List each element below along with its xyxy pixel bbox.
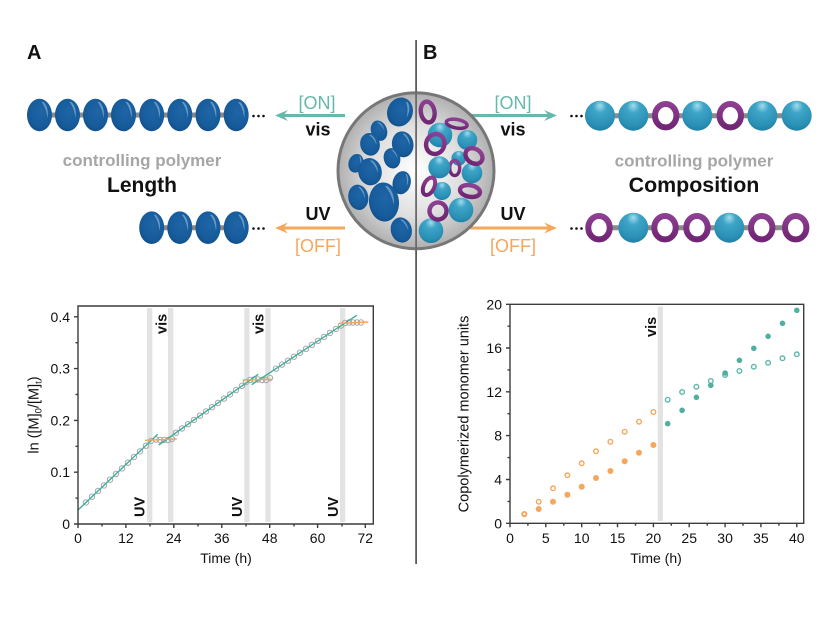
- vis label: vis: [644, 317, 660, 337]
- label: left [OFF]: [OFF]: [295, 236, 341, 256]
- y axis tick labels: [51, 309, 70, 532]
- teal spheres and purple rings in circle: [419, 100, 486, 243]
- x axis tick labels: 24: [166, 530, 182, 546]
- y axis title: /[M]: [26, 384, 42, 408]
- arrow: left vis: [275, 110, 345, 121]
- UV and vis labels: vis: [154, 314, 170, 334]
- x axis tick labels: 10: [574, 530, 590, 546]
- x axis tick labels: 5: [542, 530, 550, 546]
- data points: [86, 322, 361, 502]
- y axis title: 0: [34, 408, 44, 413]
- x axis tick labels: 15: [610, 530, 625, 546]
- y axis tick labels: 4: [494, 472, 502, 488]
- y axis tick labels: 20: [486, 296, 502, 312]
- polymer chain: long blue: [27, 99, 265, 131]
- label: left vis: vis: [305, 120, 331, 140]
- orange fit lines: [145, 322, 368, 440]
- x axis tick labels: 25: [681, 530, 697, 546]
- polymer chain: bottom composition: [570, 213, 806, 243]
- UV and vis labels: [132, 314, 342, 517]
- label: right vis: vis: [500, 120, 526, 140]
- orange open points: [522, 410, 656, 516]
- y axis title: ): [26, 376, 42, 381]
- x axis tick labels: 36: [214, 530, 230, 546]
- x axis tick labels: 35: [753, 530, 769, 546]
- center divider: [415, 40, 417, 564]
- x axis tick labels: 0: [506, 530, 514, 546]
- UV and vis labels: vis: [252, 314, 268, 334]
- label: right [ON]: [ON]: [494, 93, 532, 113]
- label: right [OFF]: [OFF]: [490, 236, 536, 256]
- label: left UV: UV: [305, 204, 331, 224]
- x axis tick labels: 72: [358, 530, 373, 546]
- y axis tick labels: 16: [486, 340, 502, 356]
- arrow: right UV: [470, 222, 557, 234]
- y axis tick labels: 0.1: [51, 464, 70, 480]
- x axis tick labels: 30: [717, 530, 733, 546]
- vis shaded bar: [658, 306, 663, 521]
- teal filled points: [665, 308, 800, 427]
- x axis tick labels: 60: [310, 530, 326, 546]
- arrow: left UV: [275, 222, 345, 234]
- label: right UV: UV: [500, 204, 526, 224]
- central circle reactor: [338, 92, 494, 250]
- text: Composition: Composition: [629, 173, 759, 197]
- y axis tick labels: 0.3: [51, 361, 70, 377]
- y axis title: Copolymerized monomer units: [456, 316, 472, 512]
- axes frame and ticks: [74, 306, 373, 528]
- y axis tick labels: [486, 296, 502, 531]
- text: Length: Length: [107, 174, 177, 197]
- polymer chain: top composition: [570, 101, 812, 131]
- x axis tick labels: 48: [262, 530, 278, 546]
- UV and vis labels: UV: [326, 497, 342, 517]
- arrow: right vis: [470, 110, 557, 121]
- y axis tick labels: 0: [494, 515, 502, 531]
- chart B: copolymerized monomer units vs time: [456, 296, 805, 566]
- text: controlling polymer left: controlling polymer: [63, 151, 222, 170]
- x axis tick labels: [74, 530, 373, 546]
- y axis tick labels: 0.2: [51, 412, 70, 428]
- teal fit lines: [78, 315, 357, 510]
- x axis tick labels: 12: [118, 530, 134, 546]
- white center of the first open point: [523, 513, 526, 515]
- axes frame and ticks: [506, 304, 804, 527]
- x axis tick labels: 20: [646, 530, 661, 546]
- teal open points: [665, 352, 799, 402]
- blue beads in circle: [346, 94, 417, 245]
- y axis title: ln ([M]: [26, 413, 42, 454]
- UV and vis labels: UV: [132, 497, 148, 517]
- text: controlling polymer right: controlling polymer: [615, 152, 774, 170]
- chart A: ln([M]0/[M]t) vs time: [26, 306, 373, 566]
- y axis tick labels: 8: [494, 428, 502, 444]
- y axis tick labels: 0.4: [51, 309, 70, 325]
- UV and vis shaded bars: [147, 308, 345, 522]
- UV and vis labels: UV: [230, 497, 246, 517]
- y axis tick labels: 0: [62, 516, 70, 532]
- label: left [ON]: [ON]: [298, 93, 336, 113]
- y axis tick labels: 12: [486, 384, 502, 400]
- x axis tick labels: [506, 530, 805, 546]
- x axis title: Time (h): [630, 550, 682, 566]
- x axis tick labels: 0: [74, 530, 82, 546]
- x axis tick labels: 40: [789, 530, 805, 546]
- heading: B: B: [423, 42, 437, 64]
- x axis title: Time (h): [200, 550, 252, 566]
- heading: A: A: [27, 42, 41, 64]
- polymer chain: short blue: [139, 211, 265, 244]
- y axis title: t: [34, 381, 44, 384]
- orange filled points: [521, 442, 656, 517]
